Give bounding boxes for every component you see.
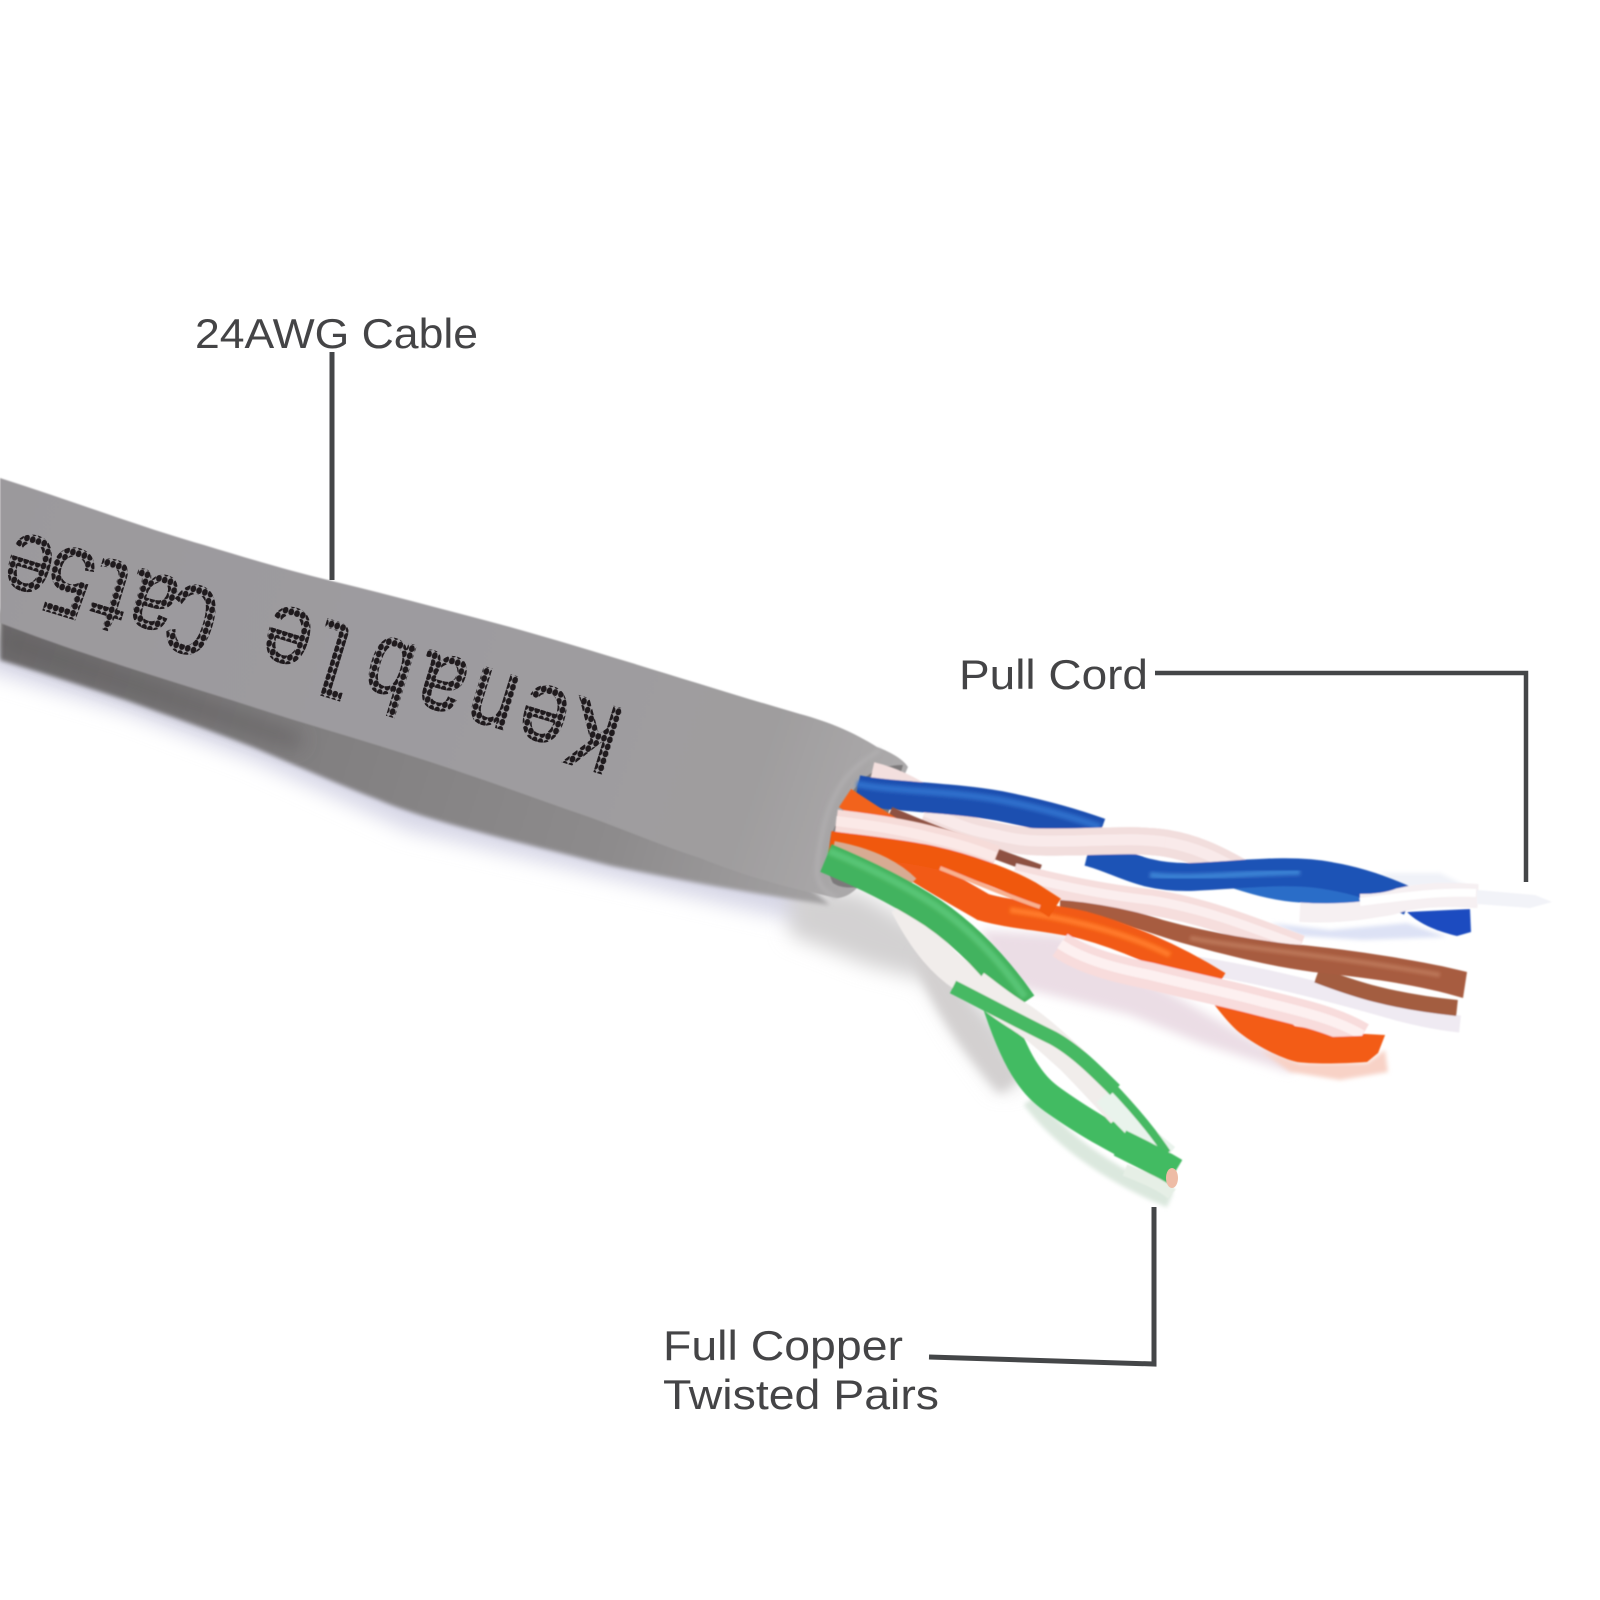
leader line: 24AWG cable: [330, 352, 334, 580]
label: Pull Cord: Pull Cord: [959, 651, 1148, 698]
pull cord: [1477, 890, 1552, 908]
label: 24AWG Cable: 24AWG Cable: [195, 310, 478, 357]
twisted pair: orange and white: [830, 798, 1385, 1064]
cable end opening: [817, 750, 903, 897]
shadows and reflections under the cable and wires: [0, 640, 1470, 1200]
label: Full Copper Twisted Pairs: Twisted Pairs: [663, 1371, 939, 1418]
twisted pair: blue and white: [857, 772, 1478, 936]
printed cable marking: Kenable: [248, 572, 637, 792]
copper conductor tip: [1166, 1168, 1178, 1188]
cable jacket: [0, 478, 908, 898]
leader line: full copper twisted pairs: [929, 1207, 1154, 1364]
cable lower band: [0, 610, 830, 905]
twisted pair: brown and white: [890, 812, 1467, 1024]
label: Full Copper Twisted Pairs: Full Copper: [663, 1322, 903, 1369]
leader line: pull cord: [1155, 673, 1526, 882]
printed cable marking: [0, 500, 637, 792]
twisted pair: green and white: [826, 850, 1175, 1194]
